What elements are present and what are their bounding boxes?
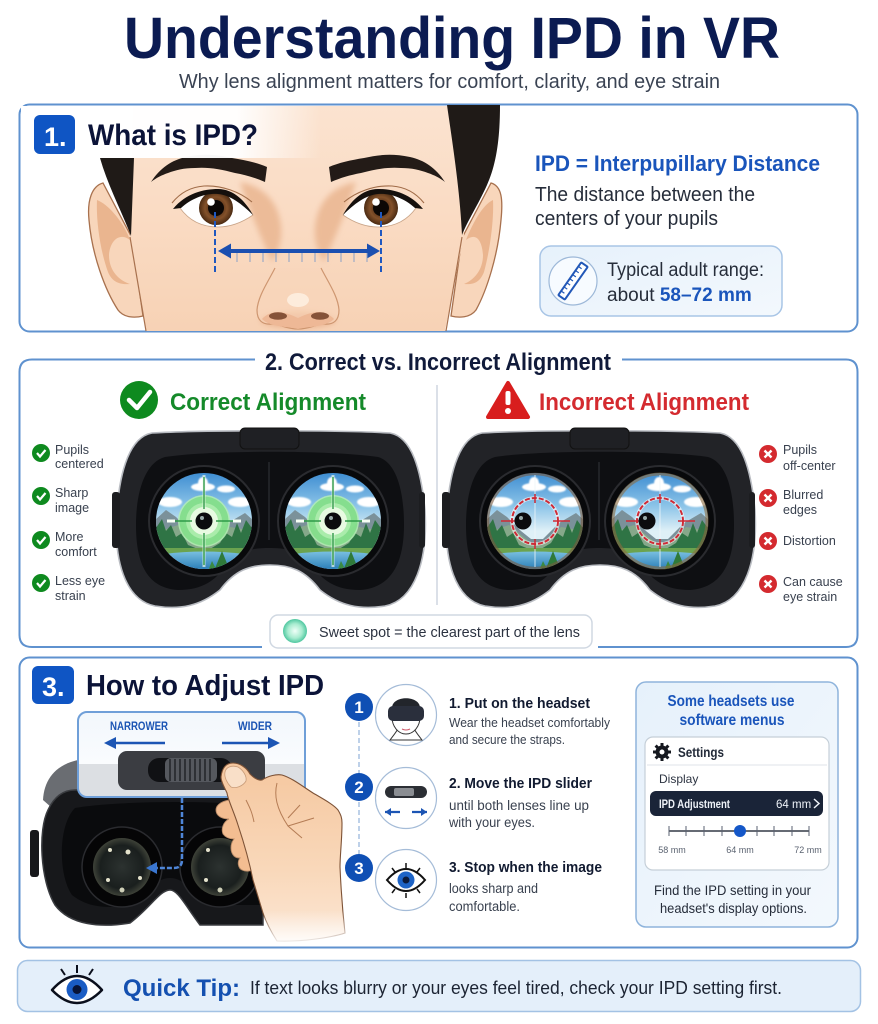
face shape: [130, 106, 464, 331]
callout: typical range: about 58–72 mm: [607, 285, 752, 306]
item: less eye strain: [32, 574, 105, 603]
label: narrower: NARROWER: [110, 721, 169, 733]
nose and socket shading: [240, 182, 356, 328]
palm and thumb: [221, 763, 345, 941]
panel: correct vs incorrect alignment: [20, 349, 858, 648]
illustration: hand: [216, 763, 345, 941]
step 1: Wear the headset comfortably: [449, 716, 611, 730]
right eye: [343, 186, 424, 227]
heading badge 1: 1.: [44, 122, 67, 152]
description: [535, 184, 755, 230]
panel: what is IPD: [20, 104, 858, 332]
left eyebrow: [151, 155, 267, 182]
item: sharp image: image: [55, 501, 89, 515]
thumb nail: [225, 766, 246, 788]
illustration: face: [89, 105, 502, 331]
step 2: 2. Move the IPD slider: [449, 775, 592, 792]
right lens: [180, 827, 260, 907]
heading badge 3: 3.: [42, 672, 65, 702]
icon: person with headset: [376, 684, 436, 746]
step 3: 3. Stop when the image: [449, 859, 602, 876]
icon: red warning triangle: [488, 383, 528, 417]
step 1: and secure the straps.: [449, 733, 565, 747]
icon: green check: [120, 381, 158, 419]
step 2: with your eyes.: [448, 815, 535, 830]
item: more comfort: More: [55, 530, 84, 544]
step 1: 1: [354, 698, 364, 717]
item: pupils centered: centered: [55, 457, 104, 471]
settings card: [645, 737, 829, 870]
heading: incorrect alignment: Incorrect Alignment: [539, 389, 749, 416]
step 2: [345, 768, 592, 830]
IPD slider: 58 mm: [658, 845, 686, 855]
step 1: 1. Put on the headset: [449, 695, 590, 712]
item: can cause eye strain: [759, 575, 843, 604]
tip text: If text looks blurry or your eyes feel tired, check your IPD setting first.: [250, 977, 782, 998]
heading: software menus: Some headsets use: [668, 693, 795, 710]
heading: section 2: 2. Correct vs. Incorrect Alignment: [265, 349, 611, 376]
icon: ruler: [549, 257, 597, 305]
divider: [436, 385, 438, 605]
slider control: [118, 751, 265, 790]
left hair: [100, 158, 134, 236]
item: sharp image: Sharp: [55, 486, 88, 500]
step 2: 2: [354, 778, 364, 797]
item: can cause eye strain: Can cause: [783, 575, 843, 589]
step 3: 3: [354, 859, 364, 878]
IPD slider: [658, 825, 822, 855]
right eyebrow: [329, 155, 445, 182]
item: blurred edges: edges: [783, 503, 817, 517]
left lens: [480, 466, 590, 576]
heading: how to adjust IPD: How to Adjust IPD: [86, 670, 324, 702]
heading: correct alignment: Correct Alignment: [170, 389, 366, 416]
item: more comfort: [32, 530, 97, 559]
quick tip banner: [18, 960, 860, 1012]
inset: slider close-up: [78, 712, 305, 797]
icon: eye: [52, 965, 102, 1003]
left ear: [89, 183, 143, 317]
step 2: until both lenses line up: [449, 798, 589, 813]
right hair: [447, 105, 500, 235]
hand creases: [246, 783, 314, 838]
icon: eye: [376, 850, 436, 910]
item: pupils centered: [32, 443, 104, 471]
right lens: [605, 466, 715, 576]
heading: software menus: [668, 693, 795, 729]
fingers: [216, 800, 262, 871]
item: pupils centered: Pupils: [55, 443, 89, 457]
IPD adjustment row: 64 mm: [776, 799, 811, 811]
headset body: [30, 760, 263, 925]
icon: slider: [376, 768, 436, 828]
IPD slider: 64 mm: [726, 845, 754, 855]
title: Understanding IPD in VR: [124, 6, 780, 71]
label: wider: WIDER: [238, 721, 273, 733]
settings card: Display: [659, 772, 698, 786]
headset: correct alignment: [112, 428, 425, 607]
software menu panel: [636, 682, 838, 927]
label: quick tip: Quick Tip:: [123, 975, 240, 1002]
software note: Find the IPD setting in your: [654, 882, 811, 898]
left eye: [172, 186, 253, 227]
step 3: [345, 850, 602, 914]
icon: gear: [653, 743, 671, 761]
IPD adjustment row: [650, 791, 823, 816]
item: can cause eye strain: eye strain: [783, 590, 837, 604]
item: pupils off-center: off-center: [783, 459, 836, 473]
heading badge 1: [34, 115, 75, 154]
nose: [257, 268, 339, 329]
description: The distance between the: [535, 184, 755, 206]
heading: software menus: software menus: [680, 712, 785, 729]
IPD measurement arrow: [215, 212, 381, 273]
IPD definition: IPD = Interpupillary Distance: [535, 151, 820, 176]
software note: headset's display options.: [660, 900, 807, 916]
heading badge 3: [32, 666, 74, 704]
label: narrower: [104, 721, 169, 749]
description: centers of your pupils: [535, 208, 718, 230]
left lens: [82, 827, 162, 907]
label: wider: [222, 721, 280, 749]
dashed pointer to lens: [146, 798, 182, 874]
right lens: [278, 466, 388, 576]
list: incorrect problems: [759, 443, 843, 604]
subtitle: Why lens alignment matters for comfort, clarity, and eye strain: [179, 71, 720, 93]
step 3: looks sharp and: [449, 881, 538, 896]
settings card: Settings: [678, 744, 724, 760]
item: less eye strain: Less eye: [55, 574, 105, 588]
callout: typical range: Typical adult range:: [607, 260, 764, 281]
item: sharp image: [32, 486, 89, 515]
step 3: comfortable.: [449, 899, 520, 914]
callout: typical range: [540, 246, 782, 316]
callout: sweet spot: [270, 615, 592, 648]
heading: what is IPD: What is IPD?: [88, 119, 258, 152]
panel: how to adjust IPD: [20, 658, 858, 948]
step 1: [345, 684, 611, 747]
headset: incorrect alignment: [442, 428, 755, 607]
illustration: headset being adjusted: [30, 712, 354, 946]
list: correct benefits: [32, 443, 105, 603]
item: distortion: Distortion: [783, 534, 836, 548]
item: more comfort: comfort: [55, 545, 97, 559]
item: blurred edges: Blurred: [783, 488, 823, 502]
item: distortion: [759, 532, 836, 550]
hand fade: [264, 910, 354, 946]
callout: sweet spot: Sweet spot = the clearest part of the lens: [319, 624, 580, 641]
heading fade: [21, 106, 321, 158]
item: pupils off-center: Pupils: [783, 443, 817, 457]
icon: sweet spot: [283, 619, 307, 643]
right ear: [451, 183, 502, 317]
steps: [345, 684, 611, 914]
item: pupils off-center: [759, 443, 836, 473]
IPD adjustment row: IPD Adjustment: [659, 799, 730, 811]
IPD slider: 72 mm: [794, 845, 822, 855]
item: blurred edges: [759, 488, 823, 517]
left lens: [149, 466, 259, 576]
item: less eye strain: strain: [55, 589, 86, 603]
software note: [654, 882, 811, 916]
